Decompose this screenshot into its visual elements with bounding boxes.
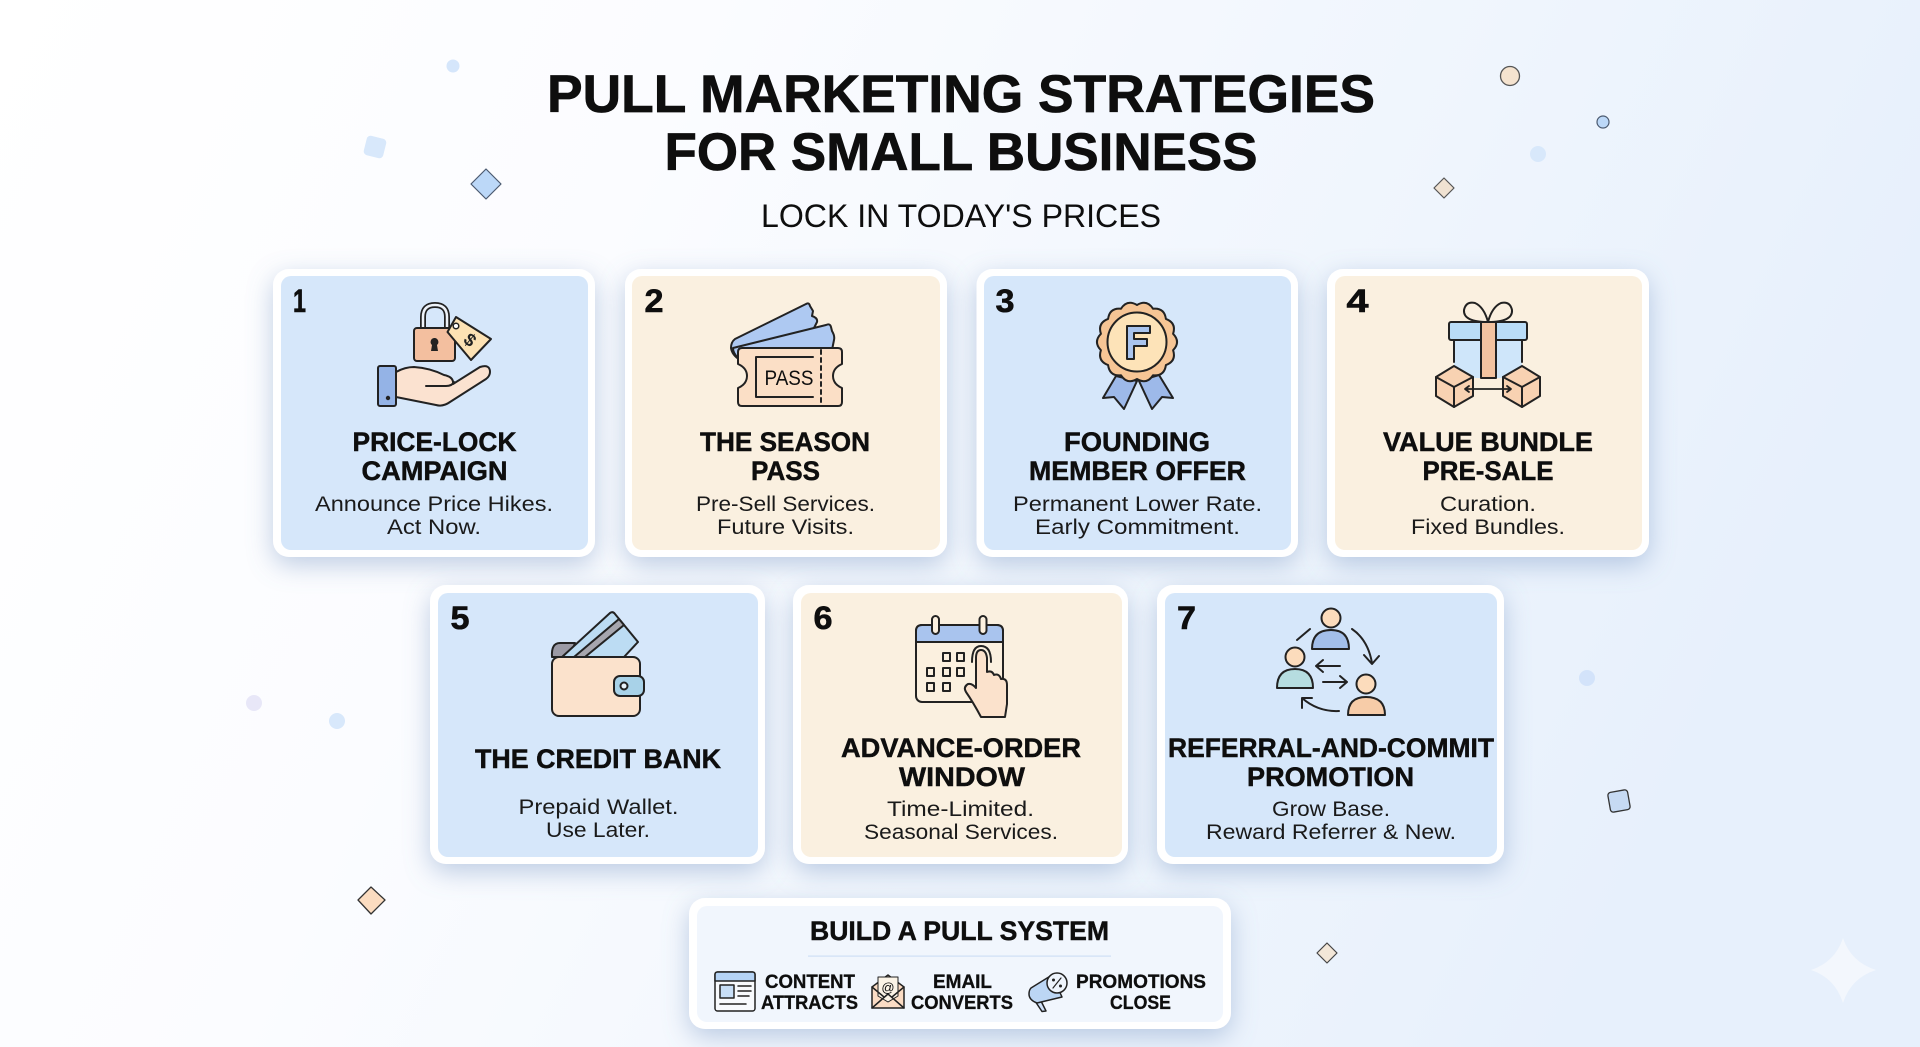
description: Announce Price Hikes. bbox=[315, 492, 553, 516]
label: email converts: CONVERTS bbox=[911, 992, 1013, 1014]
label: content attracts: ATTRACTS bbox=[761, 992, 858, 1014]
number 1: 1 bbox=[293, 283, 306, 319]
description bbox=[518, 795, 678, 842]
panel: card 1 price-lock campaign bbox=[273, 269, 595, 557]
label: email converts bbox=[911, 971, 1013, 1014]
description bbox=[315, 492, 553, 539]
description bbox=[1411, 492, 1565, 539]
heading: PRE-SALE bbox=[1422, 456, 1554, 486]
icon: calendar with tapping hand bbox=[916, 616, 1007, 717]
heading: PROMOTION bbox=[1247, 762, 1414, 792]
icon: tickets bbox=[731, 303, 842, 406]
label: promotions close: CLOSE bbox=[1110, 992, 1171, 1014]
number 4: 4 bbox=[1346, 283, 1369, 319]
description: Permanent Lower Rate. bbox=[1013, 492, 1262, 516]
heading: VALUE BUNDLE bbox=[1383, 427, 1593, 457]
heading: THE CREDIT BANK bbox=[475, 744, 721, 774]
description bbox=[1013, 492, 1262, 539]
icon: three people with arrows bbox=[1277, 608, 1385, 715]
panel: build a pull system bbox=[689, 898, 1231, 1029]
description: Seasonal Services. bbox=[864, 820, 1058, 844]
description: Future Visits. bbox=[717, 515, 854, 539]
label: content attracts: CONTENT bbox=[765, 971, 855, 993]
description: Reward Referrer & New. bbox=[1206, 820, 1456, 844]
heading: WINDOW bbox=[899, 762, 1026, 792]
description: Time-Limited. bbox=[887, 797, 1034, 821]
panel: card 5 the credit bank bbox=[430, 585, 765, 864]
icon label: pass: PASS bbox=[764, 367, 814, 390]
label: promotions close: PROMOTIONS bbox=[1076, 971, 1206, 993]
number 6: 6 bbox=[814, 600, 832, 636]
icon: wallet with card bbox=[552, 612, 644, 716]
panel: card 6 advance-order window bbox=[793, 585, 1128, 864]
label: email converts: EMAIL bbox=[933, 971, 992, 993]
tag dollar sign: $ bbox=[460, 329, 480, 351]
icon: megaphone with percent bbox=[1029, 973, 1067, 1012]
heading bbox=[1029, 427, 1246, 486]
email at sign: @ bbox=[881, 980, 895, 995]
decorative confetti shapes bbox=[246, 60, 1876, 1003]
heading: REFERRAL-AND-COMMIT bbox=[1168, 733, 1494, 763]
panel: card 7 referral-and-commit promotion bbox=[1157, 585, 1504, 864]
heading: BUILD A PULL SYSTEM bbox=[810, 916, 1109, 946]
heading: PRICE-LOCK bbox=[352, 427, 517, 457]
heading: ADVANCE-ORDER bbox=[841, 733, 1081, 763]
heading: THE SEASON bbox=[700, 427, 870, 457]
icon: web page content bbox=[715, 972, 755, 1011]
description: Prepaid Wallet. bbox=[518, 795, 678, 819]
number 7: 7 bbox=[1177, 600, 1196, 636]
heading: CAMPAIGN bbox=[362, 456, 508, 486]
description: Act Now. bbox=[387, 515, 481, 539]
description bbox=[1206, 797, 1456, 844]
description bbox=[864, 797, 1058, 844]
title: PULL MARKETING STRATEGIES bbox=[547, 65, 1375, 124]
title bbox=[547, 65, 1375, 182]
icon: padlock, price tag and hand bbox=[378, 305, 491, 406]
icon: gift box and cubes bbox=[1436, 303, 1540, 407]
heading bbox=[352, 427, 517, 486]
number 3: 3 bbox=[996, 283, 1014, 319]
panel: card 2 the season pass bbox=[625, 269, 947, 557]
description: Curation. bbox=[1440, 492, 1536, 516]
description: Use Later. bbox=[546, 818, 650, 842]
title: FOR SMALL BUSINESS bbox=[664, 123, 1258, 182]
description: Pre-Sell Services. bbox=[696, 492, 875, 516]
icon: rosette with F bbox=[1097, 303, 1177, 409]
panel: card 3 founding member offer bbox=[976, 269, 1298, 557]
description: Grow Base. bbox=[1272, 797, 1390, 821]
panel: card 4 value bundle pre-sale bbox=[1327, 269, 1649, 557]
label: content attracts bbox=[761, 971, 858, 1014]
heading bbox=[841, 733, 1081, 792]
icon: email envelope bbox=[872, 975, 904, 1008]
description: Fixed Bundles. bbox=[1411, 515, 1565, 539]
heading bbox=[1168, 733, 1494, 792]
heading: MEMBER OFFER bbox=[1029, 456, 1246, 486]
subtitle: LOCK IN TODAY'S PRICES bbox=[761, 198, 1161, 234]
number 2: 2 bbox=[644, 283, 664, 319]
description bbox=[696, 492, 875, 539]
description: Early Commitment. bbox=[1035, 515, 1240, 539]
heading bbox=[1383, 427, 1593, 486]
heading: FOUNDING bbox=[1064, 427, 1210, 457]
heading bbox=[700, 427, 870, 486]
heading: PASS bbox=[751, 456, 820, 486]
label: promotions close bbox=[1076, 971, 1206, 1014]
number 5: 5 bbox=[450, 600, 470, 636]
